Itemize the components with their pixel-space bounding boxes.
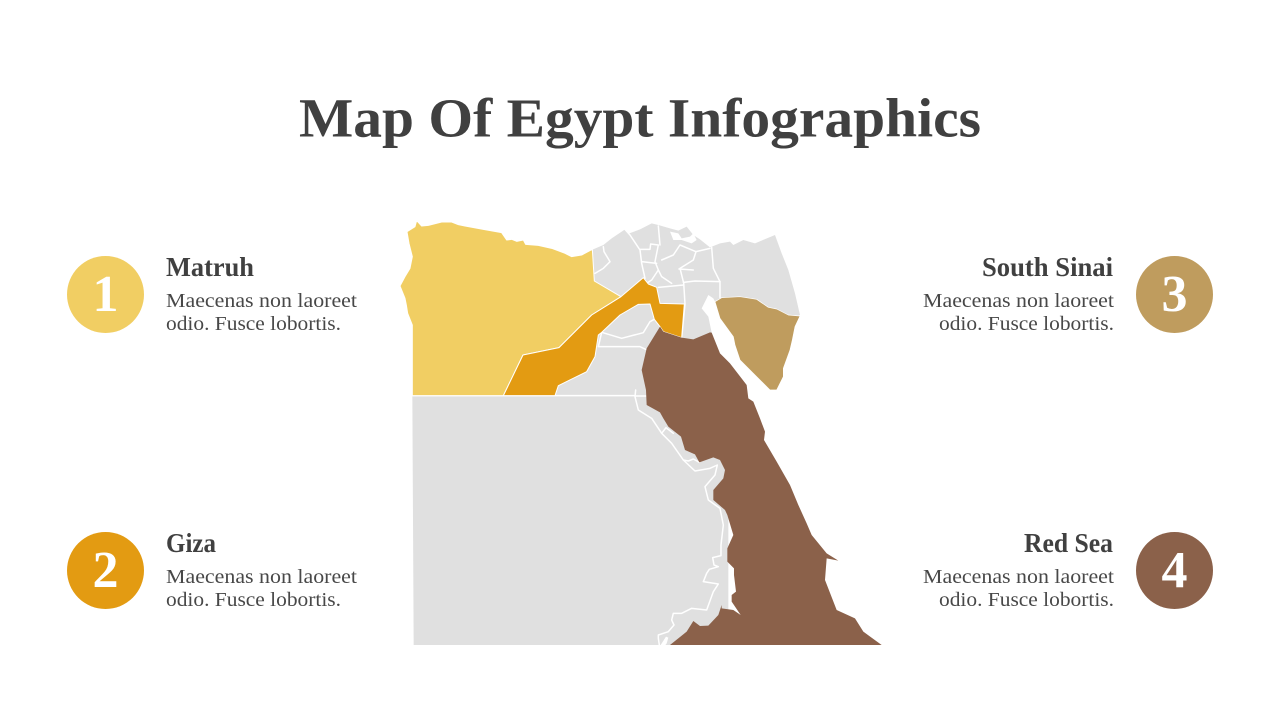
text: Matruh description: Maecenas non laoreet	[166, 290, 357, 312]
badge 2	[67, 532, 144, 609]
callout: Giza	[67, 528, 357, 611]
title: Map Of Egypt Infographics	[299, 88, 981, 148]
number 2: 2	[92, 542, 118, 599]
text: South Sinai description: Maecenas non laoreet	[923, 290, 1114, 312]
region: coastal lake	[670, 232, 697, 243]
callout: South Sinai: odio. Fusce lobortis.	[939, 313, 1114, 335]
callout: Red Sea: odio. Fusce lobortis.	[939, 589, 1114, 611]
region: governorate borders	[412, 226, 723, 645]
badge 3	[1136, 256, 1213, 333]
region: Gulf of Suez	[702, 295, 777, 395]
number 3: 3	[1162, 266, 1188, 323]
region: southern sliver	[661, 637, 668, 646]
text: Red Sea description: Maecenas non laoreet	[923, 566, 1114, 588]
callout: Giza: odio. Fusce lobortis.	[166, 589, 341, 611]
heading: South Sinai: South Sinai	[982, 252, 1113, 282]
region: Giza	[503, 278, 684, 396]
heading: Red Sea: Red Sea	[1024, 528, 1113, 558]
number 1: 1	[92, 266, 118, 323]
number 4: 4	[1162, 542, 1188, 599]
region: Matruh	[400, 221, 621, 396]
callout: Matruh	[67, 252, 357, 335]
region: other governorates	[412, 223, 800, 645]
badge 1	[67, 256, 144, 333]
region: Red Sea	[642, 327, 882, 645]
text: Giza description: Maecenas non laoreet	[166, 566, 357, 588]
map of Egypt	[400, 221, 882, 646]
callout: Matruh: odio. Fusce lobortis.	[166, 313, 341, 335]
callout: Red Sea	[923, 528, 1213, 611]
region: South Sinai	[715, 297, 800, 390]
callout: South Sinai	[923, 252, 1213, 335]
heading: Matruh: Matruh	[166, 252, 254, 282]
badge 4	[1136, 532, 1213, 609]
heading: Giza: Giza	[166, 528, 216, 558]
